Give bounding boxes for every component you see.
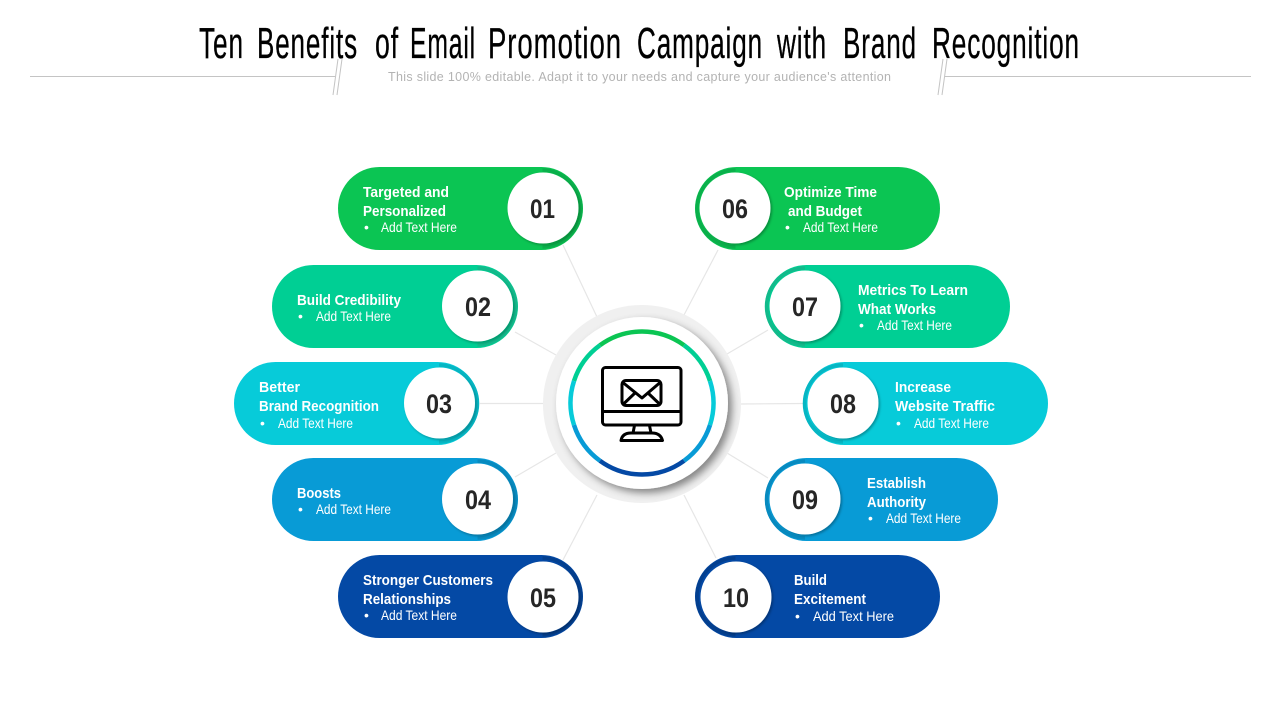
number badge 10 (697, 558, 772, 635)
panel: 08 Increase Website Traffic (803, 362, 1048, 445)
text: 02: • (298, 308, 303, 324)
title: Benefits (257, 19, 358, 68)
text: 03 (259, 379, 379, 431)
number badge 07: 07 (792, 292, 818, 322)
text: 03: Add Text Here (278, 415, 353, 431)
text: 07: • (859, 317, 864, 333)
hub outer ring (543, 305, 741, 503)
title: Email (410, 19, 476, 68)
text: 02 (297, 292, 402, 324)
text: 07: Metrics To Learn (858, 282, 968, 299)
text: 08: Increase (895, 379, 951, 396)
text: 06: and Budget (788, 203, 862, 220)
number badge 01: 01 (530, 194, 555, 224)
number badge 08 (805, 365, 878, 442)
title rule: left (30, 59, 342, 95)
panel: 05 Stronger Customers Relationships (338, 555, 583, 638)
text: 09: Add Text Here (886, 510, 961, 526)
panel: 09 Establish Authority (765, 458, 998, 541)
title: of (375, 19, 399, 68)
title: Recognition (932, 19, 1080, 68)
text: 06: Add Text Here (803, 219, 878, 235)
number badge 04 (442, 461, 516, 538)
text: 03: Better (259, 379, 300, 396)
text: 10: • (795, 608, 800, 624)
text: 01 (363, 184, 457, 235)
text: 08: Website Traffic (895, 398, 995, 415)
number badge 02 (442, 268, 516, 345)
text: 05: • (364, 607, 369, 623)
title: Brand (843, 19, 917, 68)
connector lines (480, 245, 803, 560)
number badge 09 (766, 461, 840, 538)
text: 03: Brand Recognition (259, 398, 379, 415)
text: 04: • (298, 501, 303, 517)
text: 10: Excitement (794, 591, 866, 608)
text: 07 (858, 282, 968, 333)
text: 05: Add Text Here (381, 607, 457, 623)
number badge 06 (697, 170, 770, 247)
number badge 08: 08 (830, 389, 856, 419)
title: Campaign (637, 19, 763, 68)
text: 10: Build (794, 572, 827, 589)
text: 10 (794, 572, 894, 624)
hub white disc (556, 317, 728, 489)
title (199, 19, 1080, 68)
number badge 03 (404, 365, 478, 442)
text: 01: Personalized (363, 203, 446, 220)
panel: 02 Build Credibility (272, 265, 518, 348)
text: 06: • (785, 219, 790, 235)
text: 05 (363, 572, 493, 623)
number badge 10: 10 (723, 583, 749, 613)
number badge 02: 02 (465, 292, 491, 322)
text: 09 (867, 475, 961, 526)
text: 04: Add Text Here (316, 501, 391, 517)
panel: 01 Targeted and Personalized (338, 167, 583, 250)
title rule: right (938, 59, 1251, 95)
text: 09: • (868, 510, 873, 526)
text: 05: Relationships (363, 591, 451, 608)
title: with (776, 19, 827, 68)
text: 04 (297, 485, 391, 517)
text: 08: • (896, 415, 901, 431)
text: 01: Add Text Here (381, 219, 457, 235)
text: 09: Authority (867, 494, 927, 511)
text: 05: Stronger Customers (363, 572, 493, 589)
text: 06: Optimize Time (784, 184, 877, 201)
hub segmented colour ring (571, 332, 713, 474)
panel: 10 Build Excitement (695, 555, 940, 638)
text: 08: Add Text Here (914, 415, 989, 431)
number badge 07 (767, 268, 840, 345)
text: 07: What Works (858, 301, 936, 318)
number badge 03: 03 (426, 389, 452, 419)
number badge 01 (508, 170, 581, 247)
text: 09: Establish (867, 475, 926, 492)
central hub (543, 305, 741, 503)
text: 02: Build Credibility (297, 292, 402, 309)
text: 01: Targeted and (363, 184, 449, 201)
panel: 03 Better Brand Recognition (234, 362, 479, 445)
text: 10: Add Text Here (813, 608, 894, 624)
text: 03: • (260, 415, 265, 431)
subtitle: This slide 100% editable. Adapt it to your needs and capture your audience's attention (388, 70, 891, 84)
text: 07: Add Text Here (877, 317, 952, 333)
text: 04: Boosts (297, 485, 341, 502)
panel: 04 Boosts (272, 458, 518, 541)
title: Ten (199, 19, 244, 68)
title: Promotion (488, 19, 622, 68)
text: 01: • (364, 219, 369, 235)
number badge 05 (508, 558, 581, 635)
text: 02: Add Text Here (316, 308, 391, 324)
panel: 06 Optimize Time and Budget (695, 167, 940, 250)
number badge 09: 09 (792, 485, 818, 515)
number badge 05: 05 (530, 583, 556, 613)
number badge 06: 06 (722, 194, 748, 224)
number badge 04: 04 (465, 485, 491, 515)
text: 06 (784, 184, 878, 235)
text: 08 (895, 379, 995, 431)
icon: monitor with envelope (602, 368, 681, 440)
panel: 07 Metrics To Learn What Works (765, 265, 1010, 348)
